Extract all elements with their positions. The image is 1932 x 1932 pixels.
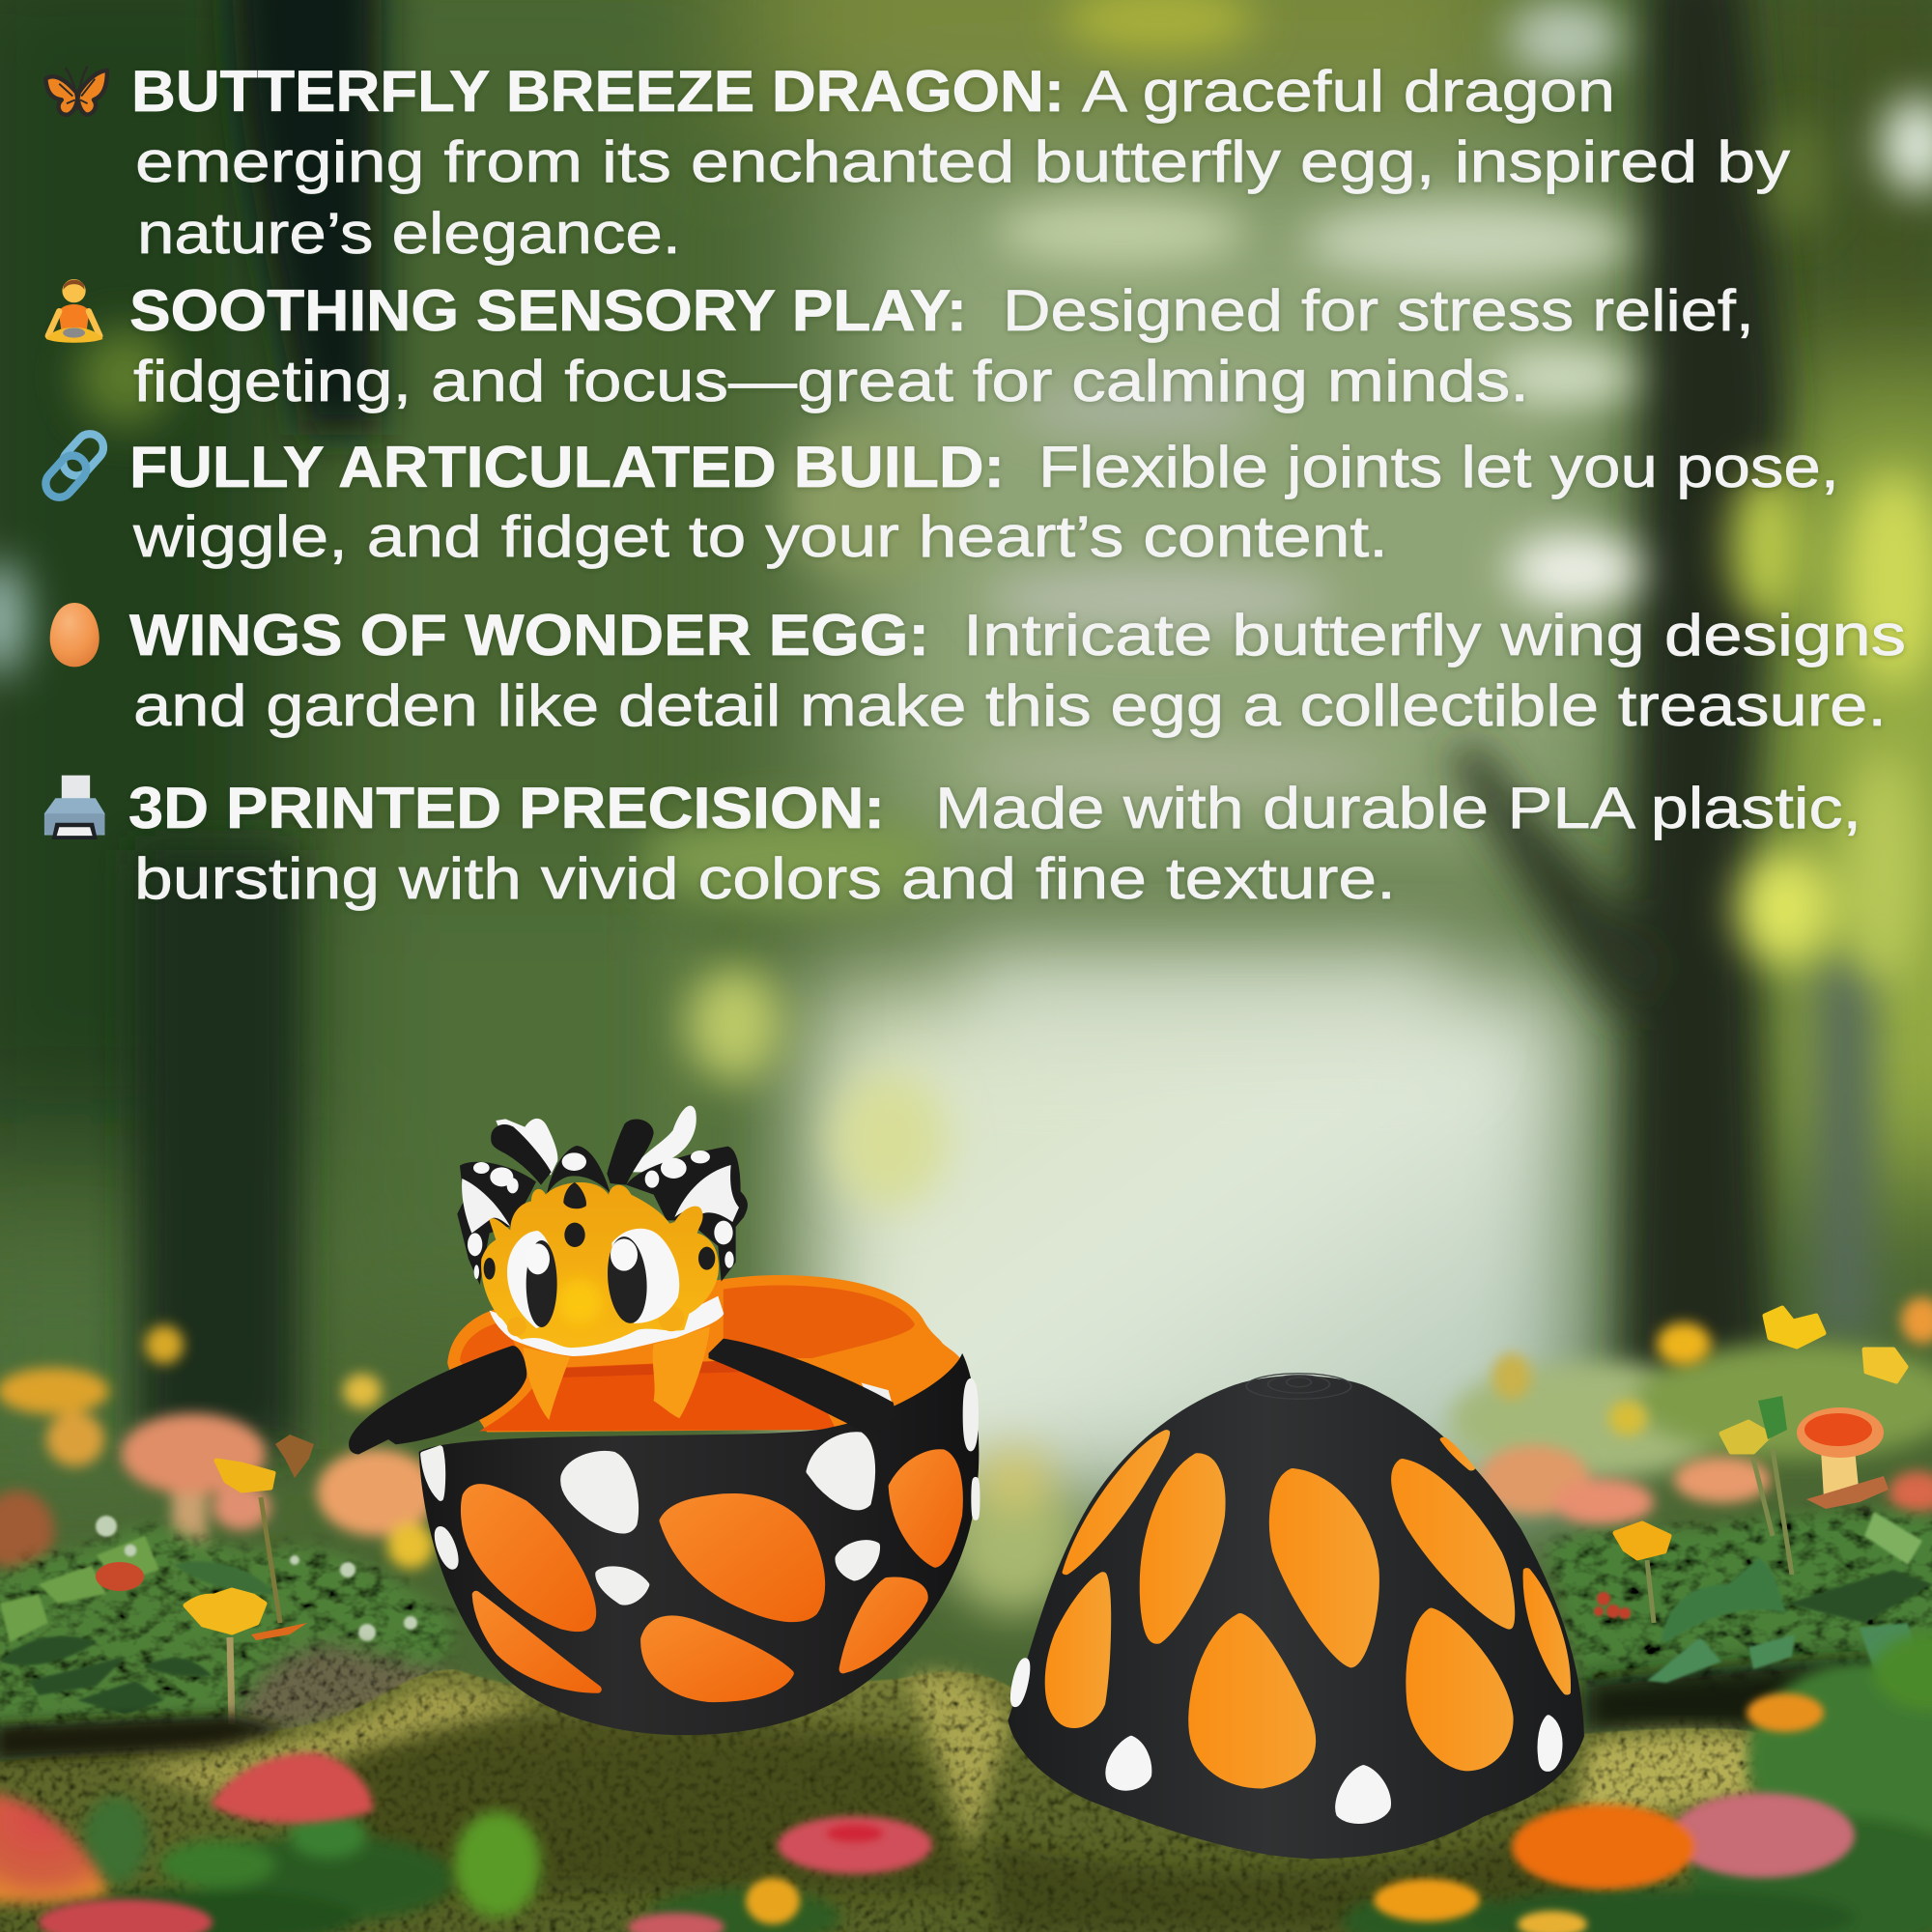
right bush — [1546, 1511, 1932, 1704]
background foliage and mushrooms, left — [0, 1325, 464, 1734]
item: soothing sensory play: Designed for stress relief, — [1003, 278, 1754, 343]
icons column — [41, 67, 109, 839]
moss shadow beneath the eggs — [328, 1712, 1604, 1932]
dome orange panels — [1048, 1433, 1567, 1786]
dome white spots — [1009, 1659, 1560, 1822]
icon: chain link — [41, 428, 109, 503]
dragon black spots — [484, 1182, 715, 1280]
item: 3d printed precision: bursting with vivid colors and fine texture. — [134, 846, 1396, 911]
background: central mist — [802, 976, 1584, 1507]
open egg bottom with dragon — [349, 1275, 979, 1735]
moss lit ledge edges — [126, 1673, 1760, 1850]
mossy ground — [0, 1669, 1932, 1932]
item: butterfly breeze dragon: emerging from its enchanted butterfly egg, inspired by — [135, 129, 1790, 194]
item: soothing sensory play: SOOTHING SENSORY PLAY: — [129, 278, 967, 343]
foreground red mushroom, left — [39, 1753, 373, 1932]
item: fully articulated build: Flexible joints let you pose, — [1038, 435, 1839, 499]
soil patch — [232, 1645, 464, 1734]
background foliage and mushrooms, right — [1323, 1297, 1932, 1734]
item: butterfly breeze dragon: nature’s elegance. — [137, 201, 681, 266]
dragon head — [457, 1106, 748, 1420]
red bud — [96, 1562, 144, 1591]
item: wings of wonder egg: Intricate butterfly wing designs — [963, 603, 1906, 668]
item: butterfly breeze dragon: BUTTERFLY BREEZE DRAGON: — [131, 59, 1065, 124]
yellow flowers, right — [1615, 1308, 1906, 1623]
item: butterfly breeze dragon: A graceful dragon — [1082, 59, 1615, 124]
dragon right wing — [709, 1339, 895, 1435]
dragon eyes — [507, 1229, 679, 1328]
egg orange wing panels — [465, 1453, 959, 1698]
item: wings of wonder egg — [129, 603, 1906, 738]
left bush — [0, 1525, 453, 1734]
item: butterfly breeze dragon — [131, 59, 1790, 266]
foreground red mushroom, centre — [628, 1816, 932, 1932]
icon: printer — [44, 776, 104, 839]
text block: feature list — [128, 59, 1906, 911]
foreground red mushroom, far left — [0, 1792, 108, 1903]
dragon yellow face — [481, 1182, 719, 1348]
dragon frilled ears — [457, 1146, 748, 1285]
background: fog under the text — [966, 947, 1449, 1072]
yellow flower, lower left — [185, 1590, 307, 1724]
left bush leaves — [0, 1516, 417, 1715]
item: soothing sensory play: fidgeting, and focus—great for calming minds. — [133, 349, 1529, 413]
icon: egg — [50, 603, 99, 667]
right dark soil — [1584, 1657, 1932, 1734]
egg black shell — [419, 1353, 979, 1735]
background: tree trunks — [135, 0, 1874, 1449]
dragon left wing — [349, 1346, 526, 1454]
item: 3d printed precision: 3D PRINTED PRECISION: — [128, 776, 885, 840]
foreground blurred mushrooms and leaves — [0, 1633, 1932, 1932]
egg top dome — [1008, 1374, 1584, 1859]
item: fully articulated build: wiggle, and fidget to your heart’s content. — [132, 504, 1388, 569]
item: fully articulated build — [129, 435, 1839, 569]
egg white spots — [423, 1381, 977, 1602]
foreground green leaves — [83, 1797, 541, 1918]
item: wings of wonder egg: WINGS OF WONDER EGG: — [129, 603, 929, 668]
orange mushroom, right — [1797, 1407, 1889, 1509]
dragon white collar — [490, 1296, 724, 1356]
icon: butterfly — [45, 67, 107, 115]
foreground orange mushroom, right — [1374, 1693, 1855, 1932]
yellow flower, upper left — [216, 1435, 314, 1623]
dragon fangs — [524, 1326, 710, 1420]
dome black shell — [1008, 1376, 1584, 1859]
dome print rings — [1246, 1374, 1351, 1399]
item: soothing sensory play — [129, 278, 1754, 413]
right bush leaves — [1594, 1512, 1932, 1700]
item: fully articulated build: FULLY ARTICULATED BUILD: — [129, 435, 1005, 499]
dark soil strip — [0, 1715, 290, 1760]
item: 3d printed precision: Made with durable PLA plastic, — [935, 776, 1861, 840]
dragon white dots — [468, 1151, 734, 1279]
dragon horns — [491, 1106, 696, 1185]
item: wings of wonder egg: and garden like detail make this egg a collectible treasure. — [133, 673, 1887, 738]
item: 3d printed precision — [128, 776, 1861, 911]
icon: meditating person — [46, 279, 103, 343]
egg orange collar and interior — [447, 1275, 963, 1432]
